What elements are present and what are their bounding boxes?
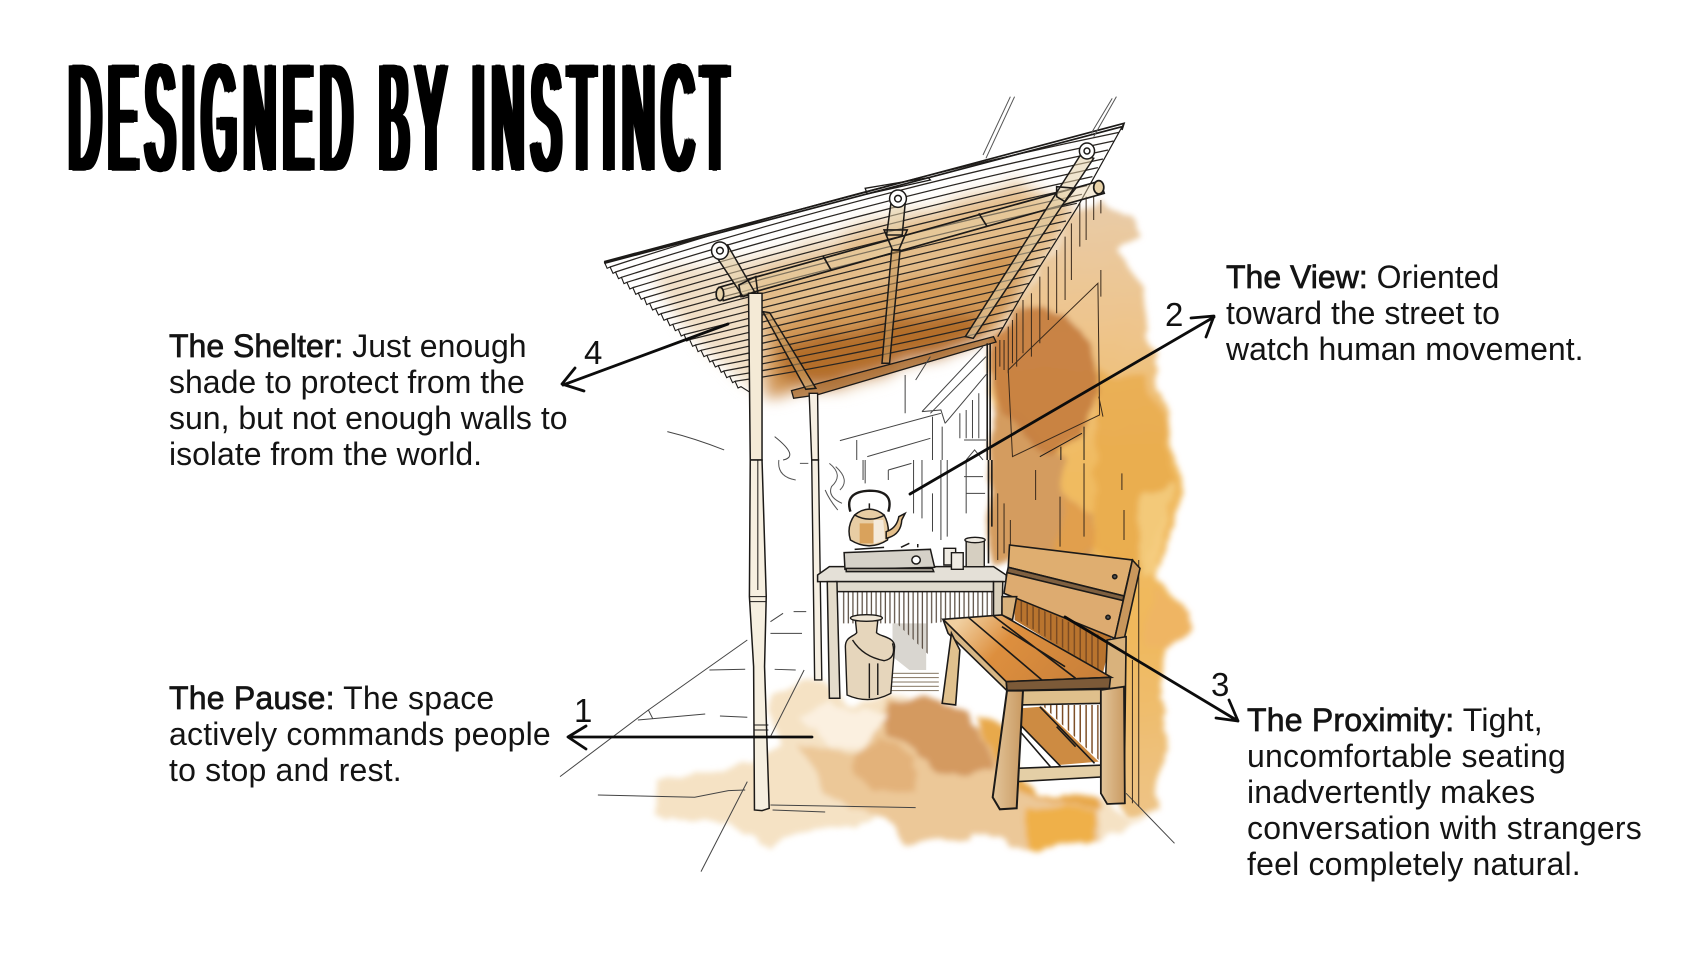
- front post lower: [749, 460, 769, 811]
- arrow 1: to The Pause: 1: [574, 692, 592, 729]
- arrow 1: to The Pause: [568, 692, 812, 749]
- ink drawing: roof and wall (upper part): [604, 97, 1124, 460]
- wall window sketch: [1008, 270, 1103, 457]
- text block: The Pause: The Pause: The space: [169, 680, 494, 716]
- sketch lines above roof: [983, 97, 1116, 158]
- text block: The View: toward the street to: [1226, 295, 1500, 331]
- table: [818, 567, 1006, 698]
- background buildings upper: [667, 347, 987, 460]
- text block: The Shelter: shade to protect from the: [169, 364, 525, 400]
- stove: [844, 543, 935, 572]
- text block: The Pause: actively commands people: [169, 716, 551, 752]
- watercolor wash: wall: [991, 200, 1196, 820]
- text block: The Pause: to stop and rest.: [169, 752, 402, 788]
- cups and jar: [944, 537, 985, 569]
- front fascia beam: [791, 337, 996, 398]
- text block: The Shelter: The Shelter: Just enough: [169, 328, 527, 364]
- text block: The Shelter: [169, 328, 568, 472]
- back post upper: [809, 393, 818, 460]
- text block: The Shelter: sun, but not enough walls to: [169, 400, 568, 436]
- arrow 4: to The Shelter: [562, 324, 728, 391]
- arrow 4: to The Shelter: 4: [584, 334, 602, 371]
- wall edge: [987, 343, 990, 460]
- kettle: [849, 491, 905, 546]
- rafters: [712, 143, 1095, 389]
- arrow 2: to The View: [910, 296, 1214, 494]
- pavement sketch lines: [560, 612, 1175, 872]
- text block: The Proximity: uncomfortable seating: [1247, 738, 1566, 774]
- front post upper: [749, 293, 762, 460]
- arrow 3: to The Proximity: 3: [1211, 666, 1229, 703]
- text block: The View: [1226, 259, 1584, 367]
- watercolor wash: floor: [657, 683, 1158, 852]
- text block: The Proximity: conversation with strangers: [1247, 810, 1642, 846]
- title: DESIGNED BY INSTINCT: [69, 33, 736, 203]
- corrugated roof lines: [610, 132, 1119, 381]
- text block: The Proximity: inadvertently makes: [1247, 774, 1535, 810]
- text block: The Pause: [169, 680, 551, 788]
- milk can: [845, 615, 895, 700]
- text block: The Proximity: feel completely natural.: [1247, 846, 1581, 882]
- arrow 2: to The View: 2: [1165, 296, 1183, 333]
- roof edges: [604, 123, 1124, 263]
- watercolor wash: roof underside: [655, 177, 1080, 398]
- text block: The Proximity: The Proximity: Tight,: [1247, 702, 1543, 738]
- back post lower: [812, 460, 822, 680]
- wall lower lines: [998, 463, 1139, 807]
- text block: The View: watch human movement.: [1226, 331, 1584, 367]
- text block: The Shelter: isolate from the world.: [169, 436, 482, 472]
- text block: The View: The View: Oriented: [1226, 259, 1499, 295]
- arrow 3: to The Proximity: [1065, 617, 1238, 721]
- bench: [942, 545, 1140, 809]
- steam: [779, 460, 844, 510]
- wall vertical streaks: [996, 197, 1101, 380]
- background buildings lower: [863, 460, 985, 540]
- cross beam: [716, 181, 1104, 301]
- text block: The Proximity: [1247, 702, 1642, 882]
- ink drawing: stall scene (lower part): [560, 460, 1175, 872]
